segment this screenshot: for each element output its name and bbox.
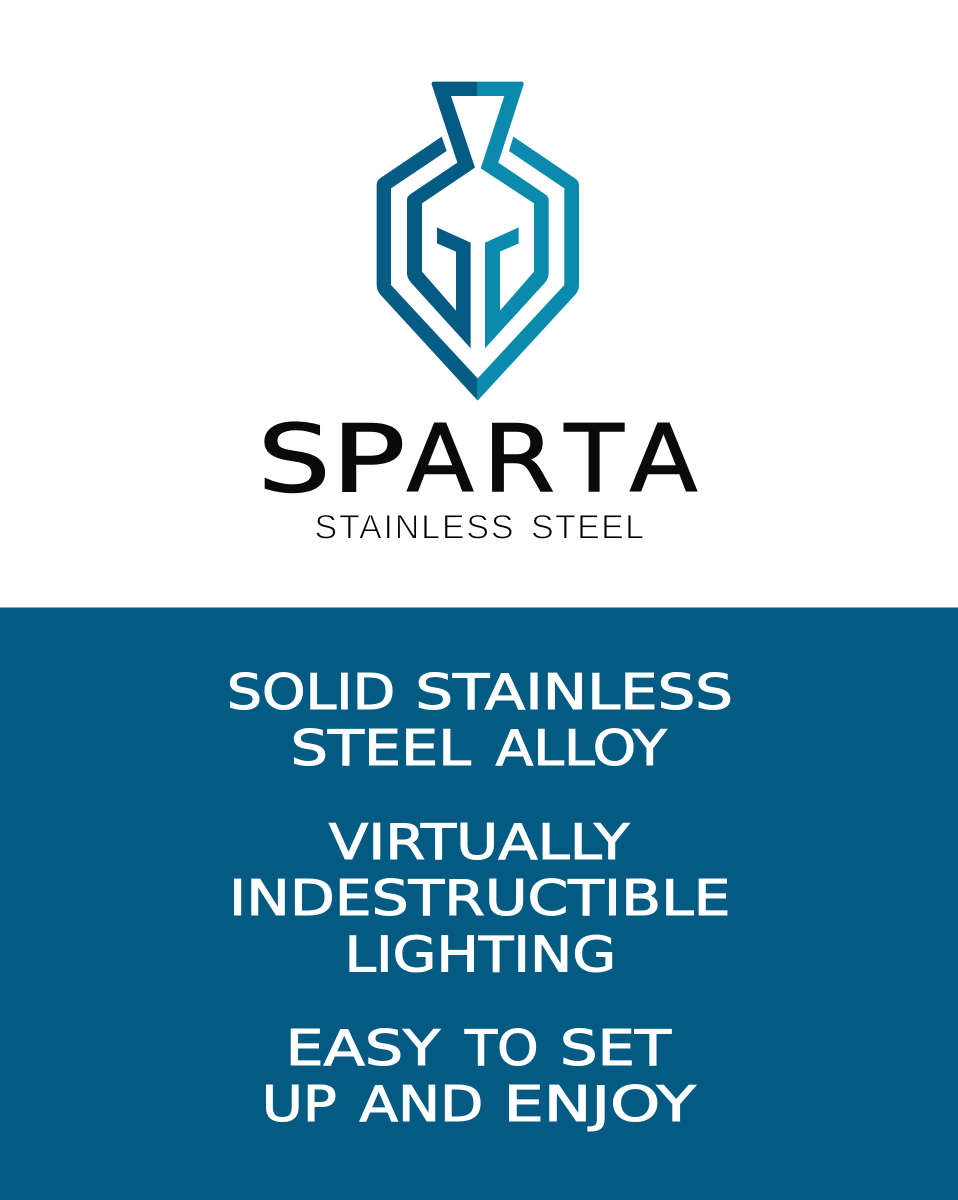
icon part: right helmet and crest: [478, 82, 549, 348]
feature text: easy to set up and enjoy: [262, 1020, 697, 1133]
panel: white logo area: [0, 0, 958, 608]
brand tagline: [314, 508, 644, 546]
feature text: easy to set up and enjoy: TO: [464, 1020, 538, 1077]
feature text: virtually indestructible lighting: VIRTUALLY: [329, 814, 631, 871]
feature text: easy to set up and enjoy: ENJOY: [504, 1076, 697, 1133]
feature text: easy to set up and enjoy: SET: [560, 1020, 672, 1077]
icon part: right outer shield: [478, 137, 579, 401]
feature text: solid stainless steel alloy: ALLOY: [496, 720, 668, 777]
feature text: solid stainless steel alloy: STAINLESS: [415, 664, 733, 721]
brand name: A: [407, 405, 474, 513]
feature text: virtually indestructible lighting: LIGHTING: [344, 926, 616, 984]
brand name: A: [630, 405, 697, 513]
brand name: T: [563, 405, 625, 513]
brand name: [258, 405, 697, 513]
brand tagline: STAINLESS: [314, 508, 514, 546]
feature text: solid stainless steel alloy: SOLID: [227, 664, 395, 721]
brand name: P: [331, 405, 406, 513]
feature text: easy to set up and enjoy: EASY: [286, 1020, 441, 1077]
panel: blue feature band: [0, 608, 958, 1200]
icon: spartan helmet logo: [377, 82, 579, 401]
feature text: virtually indestructible lighting: [229, 814, 730, 984]
icon part: left helmet and crest: [407, 82, 478, 348]
brand tagline: STEEL: [531, 508, 644, 546]
feature text: virtually indestructible lighting: INDESTRUCTIBLE: [229, 870, 730, 927]
feature text: solid stainless steel alloy: [227, 664, 733, 777]
brand name: R: [483, 405, 555, 513]
feature text: solid stainless steel alloy: STEEL: [291, 720, 472, 777]
brand name: S: [258, 405, 331, 513]
icon part: left outer shield: [377, 137, 478, 401]
feature text: easy to set up and enjoy: UP: [262, 1076, 337, 1133]
feature text: easy to set up and enjoy: AND: [360, 1076, 483, 1133]
